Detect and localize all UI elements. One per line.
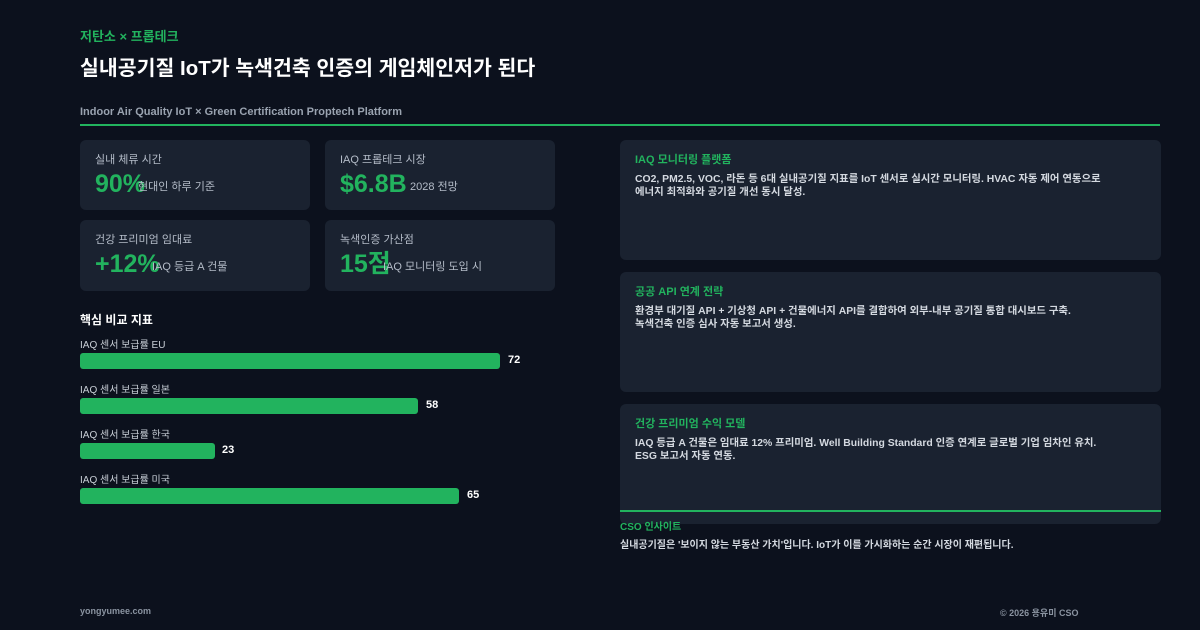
stat card: 실내 체류 시간: 현대인 하루 기준 bbox=[138, 181, 215, 193]
bar chart: IAQ 센서 보급률 EU bbox=[80, 340, 165, 351]
CSO insight: CSO 인사이트 bbox=[620, 522, 681, 533]
bar chart: IAQ 센서 보급률 일본 bbox=[80, 385, 170, 396]
stat card: 녹색인증 가산점 bbox=[325, 220, 555, 291]
kicker: 저탄소 × 프롭테크 bbox=[80, 29, 179, 44]
bar chart: 58 bbox=[426, 399, 438, 411]
stat card: 건강 프리미엄 임대료: +12% bbox=[95, 250, 160, 278]
stat card: 실내 체류 시간 bbox=[80, 140, 310, 210]
panel: IAQ 모니터링 플랫폼: CO2, PM2.5, VOC, 라돈 등 6대 실내공기질 지표를 IoT 센서로 실시간 모니터링. HVAC 자동 제어 연동으로 bbox=[635, 174, 1101, 185]
bar chart: 65 bbox=[467, 489, 479, 501]
bar chart: 23 bbox=[222, 444, 234, 456]
panel: 건강 프리미엄 수익 모델: IAQ 등급 A 건물은 임대료 12% 프리미엄. Well Building Standard 인증 연계로 글로벌 기업 임차인 유치. bbox=[635, 438, 1096, 449]
bar chart: IAQ 센서 보급률 한국 bbox=[80, 430, 170, 441]
stat card: 녹색인증 가산점: IAQ 모니터링 도입 시 bbox=[383, 261, 482, 273]
CSO insight bbox=[620, 521, 1014, 551]
bar chart: 72 bbox=[508, 354, 520, 366]
bar chart: IAQ 센서 보급률 미국 bbox=[80, 475, 170, 486]
panel: 건강 프리미엄 수익 모델: 건강 프리미엄 수익 모델 bbox=[635, 418, 745, 430]
panel: 공공 API 연계 전략: 환경부 대기질 API + 기상청 API + 건물에너지 API를 결합하여 외부-내부 공기질 통합 대시보드 구축. bbox=[635, 306, 1071, 317]
stat card: 실내 체류 시간: 90% bbox=[95, 170, 145, 198]
panel: IAQ 모니터링 플랫폼 bbox=[620, 140, 1161, 260]
stat card: 실내 체류 시간: 실내 체류 시간 bbox=[95, 154, 162, 166]
panel: 건강 프리미엄 수익 모델 bbox=[620, 404, 1161, 524]
panel: 공공 API 연계 전략 bbox=[620, 272, 1161, 392]
title: 실내공기질 IoT가 녹색건축 인증의 게임체인저가 된다 bbox=[80, 57, 535, 80]
footer right: © 2026 용유미 CSO bbox=[1000, 608, 1078, 618]
panel: IAQ 모니터링 플랫폼: IAQ 모니터링 플랫폼 bbox=[635, 154, 732, 166]
stat card: 건강 프리미엄 임대료: IAQ 등급 A 건물 bbox=[152, 261, 227, 273]
panel: 공공 API 연계 전략: 녹색건축 인증 심사 자동 보고서 생성. bbox=[635, 319, 796, 330]
stat card: 건강 프리미엄 임대료 bbox=[80, 220, 310, 291]
chart heading: 핵심 비교 지표 bbox=[80, 313, 153, 327]
CSO insight: 실내공기질은 '보이지 않는 부동산 가치'입니다. IoT가 이를 가시화하는 순간 시장이 재편됩니다. bbox=[620, 540, 1014, 551]
stat card: IAQ 프롭테크 시장: IAQ 프롭테크 시장 bbox=[340, 154, 426, 166]
stat card: IAQ 프롭테크 시장: $6.8B bbox=[340, 170, 407, 198]
stat card: 녹색인증 가산점: 녹색인증 가산점 bbox=[340, 234, 414, 246]
subtitle: Indoor Air Quality IoT × Green Certification Proptech Platform bbox=[80, 106, 402, 118]
bar chart bbox=[80, 339, 520, 504]
stat card: 녹색인증 가산점: 15점 bbox=[340, 250, 391, 278]
panel: IAQ 모니터링 플랫폼: 에너지 최적화와 공기질 개선 동시 달성. bbox=[635, 187, 805, 198]
panel: 공공 API 연계 전략: 공공 API 연계 전략 bbox=[635, 286, 723, 298]
stat card: 건강 프리미엄 임대료: 건강 프리미엄 임대료 bbox=[95, 234, 192, 246]
stat card: IAQ 프롭테크 시장 bbox=[325, 140, 555, 210]
stat card: IAQ 프롭테크 시장: 2028 전망 bbox=[410, 181, 458, 193]
footer left: yongyumee.com bbox=[80, 606, 151, 616]
panel: 건강 프리미엄 수익 모델: ESG 보고서 자동 연동. bbox=[635, 451, 735, 462]
